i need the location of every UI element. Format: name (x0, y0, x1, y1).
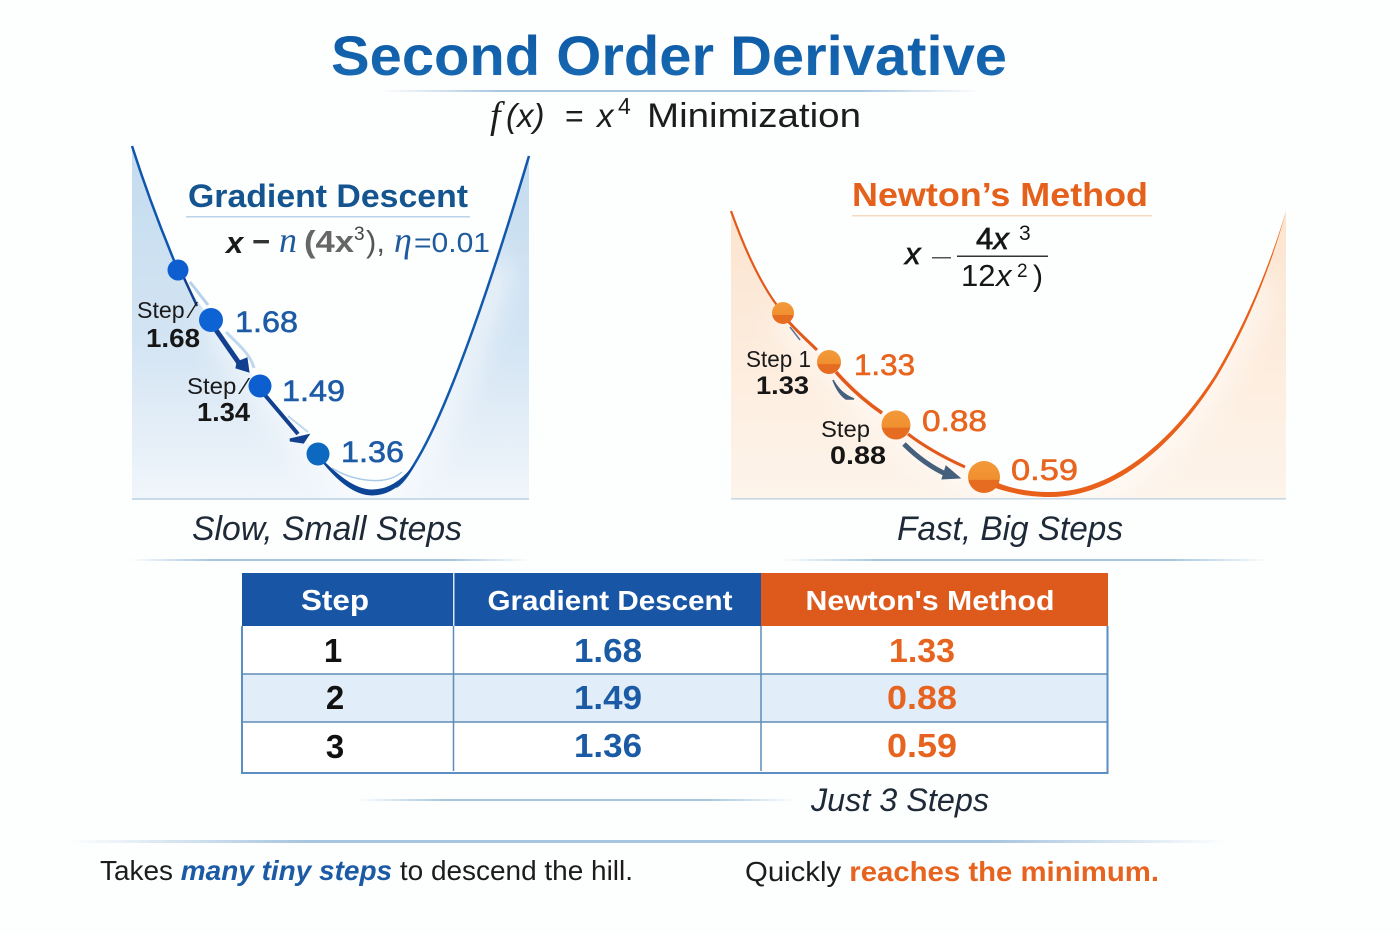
row 3: 3 (326, 728, 344, 765)
title: Second Order Derivative (331, 24, 1007, 87)
points (168, 260, 188, 280)
value labels (854, 349, 1078, 487)
formula: 2 (1017, 261, 1028, 282)
subtitle: 4 (618, 93, 631, 119)
formula: (4x (304, 224, 355, 259)
formula: − (252, 224, 270, 259)
formula: x (994, 258, 1013, 293)
caption: fast, big steps: Fast, Big Steps (897, 510, 1123, 548)
formula: η (394, 220, 412, 260)
chart background: orange hill (731, 211, 1286, 500)
panel: newton's method: Step (821, 416, 870, 442)
formula: 3 (354, 224, 365, 245)
value labels: 1.36 (341, 436, 404, 469)
subtitle: (x) (506, 97, 544, 134)
value labels: 1.49 (282, 375, 345, 408)
row 2 (326, 679, 957, 716)
formula: 4x (976, 221, 1010, 256)
arrows between points (790, 327, 800, 340)
value labels: 0.88 (922, 405, 987, 438)
subtitle: Minimization (647, 97, 861, 135)
formula: ), (366, 224, 385, 259)
curve line (132, 146, 178, 270)
takeaway: newton's method: Quickly reaches the minimum. (745, 856, 1159, 887)
heading: Gradient Descent (188, 178, 468, 214)
value labels: 1.68 (235, 306, 298, 339)
formula: 3 (1019, 222, 1031, 245)
row 2: 0.88 (887, 679, 957, 716)
subtitle: x (595, 97, 615, 134)
row 1: 1 (324, 632, 342, 669)
row 2: 1.49 (574, 679, 642, 716)
chart background: blue hill (132, 146, 529, 500)
comparison table (242, 573, 1108, 773)
step labels: Step 1 (746, 346, 811, 372)
row 1: 1.33 (889, 632, 955, 669)
value labels (235, 306, 404, 469)
panel: newton's method (731, 176, 1286, 500)
caption: just 3 steps: Just 3 Steps (810, 782, 989, 818)
formula: 12 (961, 258, 995, 293)
panel: gradient descent: Step ⁄ (187, 373, 250, 399)
table header: Step (301, 585, 369, 617)
panel: gradient descent (132, 146, 529, 500)
panel: newton's method: 1.33 (756, 372, 809, 400)
points (772, 302, 794, 324)
row 3: 0.59 (887, 727, 957, 764)
table header (242, 573, 1108, 626)
row 3 (326, 727, 957, 765)
curve line (731, 211, 783, 313)
formula: ) (1033, 260, 1043, 293)
formula: x (224, 225, 245, 260)
panel: newton's method: 0.88 (830, 442, 886, 470)
formula (224, 220, 490, 260)
formula: x (903, 236, 922, 271)
step labels: Step ⁄ (137, 297, 198, 323)
subtitle: = (565, 98, 584, 134)
formula: =0.01 (414, 227, 490, 258)
table body (242, 626, 1108, 773)
heading: Newton’s Method (852, 176, 1148, 213)
subtitle: f (490, 95, 505, 137)
takeaway: gradient descent: Takes many tiny steps to descend the hill. (100, 855, 633, 886)
row 3: 1.36 (574, 727, 642, 764)
value labels: 0.59 (1011, 454, 1078, 487)
table header: Gradient Descent (488, 585, 732, 616)
formula: n (279, 220, 297, 260)
arrows between points (184, 278, 307, 442)
row 2: 2 (326, 679, 344, 716)
value labels: 1.33 (854, 349, 915, 382)
formula (903, 221, 1048, 293)
caption: slow, small steps: Slow, Small Steps (192, 510, 462, 548)
panel: gradient descent: 1.34 (197, 397, 251, 427)
table header: Newton's Method (806, 585, 1054, 616)
subtitle (490, 93, 861, 137)
row 1 (324, 632, 955, 669)
row 1: 1.68 (574, 632, 642, 669)
panel: gradient descent: 1.68 (146, 323, 200, 353)
